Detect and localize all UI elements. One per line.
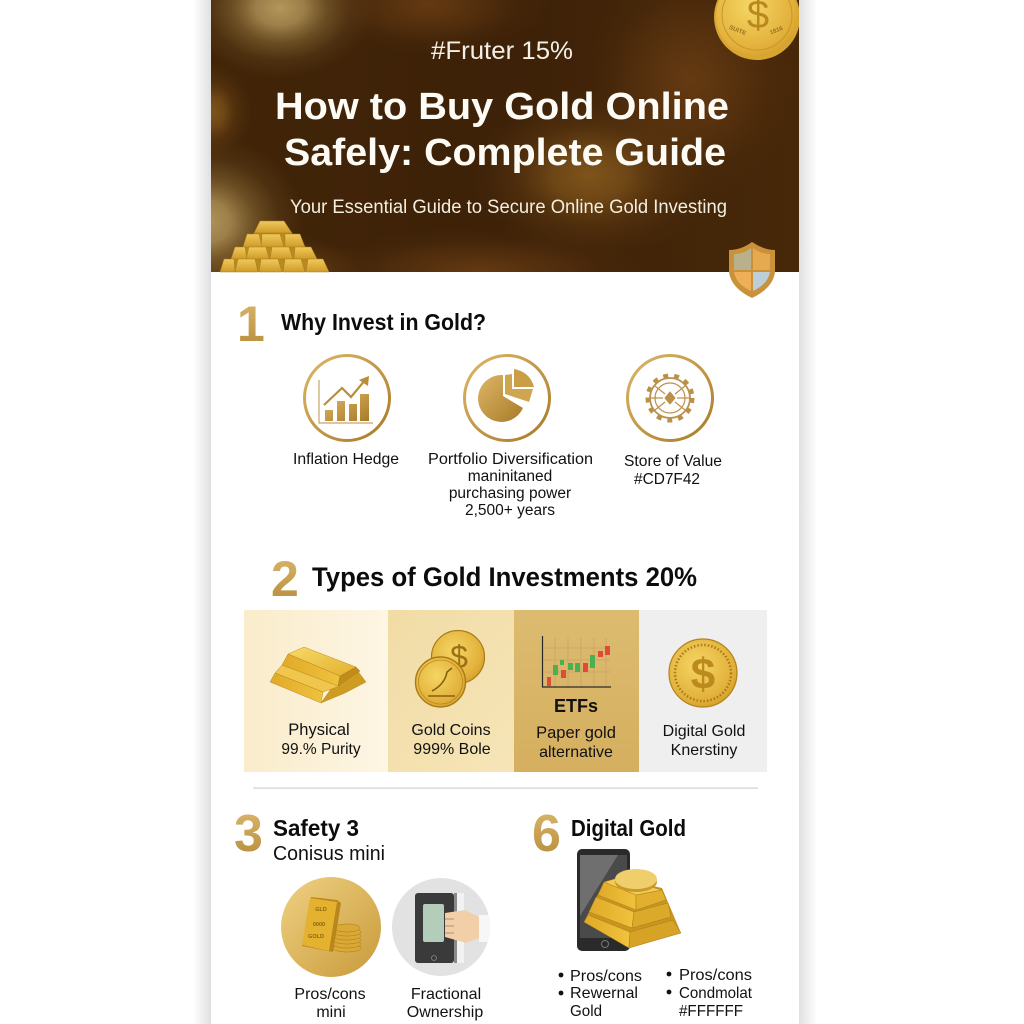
- section 1: why invest in gold: [237, 296, 722, 519]
- number 1: 1: [237, 296, 265, 352]
- heading: Why Invest in Gold?: [281, 309, 486, 335]
- icon: phone and hand circle: [392, 878, 491, 976]
- label: pros/cons mini: mini: [316, 1004, 346, 1021]
- bullet list right: #FFFFFF: [679, 1003, 743, 1020]
- label: portfolio diversification: 2,500+ years: [465, 502, 555, 519]
- header background with bokeh glow: [211, 0, 799, 272]
- label: portfolio diversification: Portfolio Diversification: [428, 451, 593, 468]
- label: Knerstiny: [671, 742, 737, 759]
- icon: two coins: $: [450, 639, 468, 675]
- icon: gold bar and coins circle: 0000: [313, 922, 325, 928]
- icon: gold bar and coins circle: GLD: [315, 907, 327, 913]
- bullet list left: Pros/cons: [570, 968, 642, 985]
- icon: phone with gold stack: [577, 849, 681, 951]
- icon: dollar coin: [669, 639, 737, 707]
- label: store of value: Store of Value: [624, 453, 722, 470]
- heading: Safety 3: [273, 815, 359, 841]
- section 2: types of gold investments: [244, 551, 767, 772]
- panel: digital gold: [639, 610, 767, 772]
- label: [536, 696, 616, 761]
- bullet list right: [667, 967, 753, 1020]
- icon: gold coin top right: 1816: [769, 26, 785, 36]
- label: portfolio diversification: maninitaned: [468, 468, 552, 485]
- label: ETFs: [554, 696, 598, 716]
- icon: gold bars: [270, 647, 366, 703]
- label: Physical: [288, 721, 350, 739]
- label: pros/cons mini: Pros/cons: [294, 986, 366, 1003]
- main title: How to Buy Gold Online: [275, 86, 729, 128]
- heading: Types of Gold Investments 20%: [312, 562, 697, 592]
- icon: gold bar and coins circle: [281, 877, 381, 977]
- label: alternative: [539, 744, 613, 761]
- section 3: safety: [234, 805, 491, 1021]
- header tag: #Fruter 15%: [431, 37, 573, 65]
- bullet list left: Gold: [570, 1003, 602, 1020]
- number 2: 2: [271, 551, 299, 607]
- icon: portfolio pie: [464, 356, 550, 440]
- label: portfolio diversification: purchasing power: [449, 485, 571, 502]
- label: store of value: #CD7F42: [634, 471, 700, 488]
- label: pros/cons mini: [294, 986, 366, 1021]
- number 3: 3: [234, 805, 263, 863]
- chart: candlesticks: [542, 636, 611, 687]
- label: fractional ownership: Fractional: [411, 986, 481, 1003]
- label: portfolio diversification: [428, 451, 593, 519]
- label: [281, 721, 361, 758]
- bullet list left: Rewernal: [570, 985, 638, 1002]
- label: Digital Gold: [663, 723, 745, 740]
- icon: inflation hedge chart: [304, 356, 390, 440]
- main title: Safely: Complete Guide: [284, 132, 726, 174]
- icon: gold coin top right: SUITE: [728, 25, 747, 37]
- bullet list right: Pros/cons: [679, 967, 752, 984]
- label: fractional ownership: [407, 986, 483, 1021]
- bullet list right: Condmolat: [679, 985, 753, 1002]
- bullet list left: [559, 968, 642, 1020]
- section 6: digital gold: [532, 805, 753, 1020]
- subheading: Conisus mini: [273, 843, 385, 865]
- label: [411, 722, 491, 758]
- panel: physical: [244, 610, 388, 772]
- label: Gold Coins: [411, 722, 491, 739]
- main title: [275, 86, 729, 174]
- label: [663, 723, 745, 759]
- label: inflation hedge: Inflation Hedge: [293, 451, 399, 468]
- panel: gold coins: [388, 610, 514, 772]
- icon: gold bar and coins circle: GOLD: [308, 934, 324, 940]
- subtitle: Your Essential Guide to Secure Online Gold Investing: [290, 196, 727, 218]
- icon: shield: [729, 242, 775, 298]
- heading: Digital Gold: [571, 815, 686, 841]
- panel: etfs: [514, 610, 639, 772]
- label: 99.% Purity: [281, 741, 361, 758]
- icon: two coins: [416, 630, 484, 707]
- label: Paper gold: [536, 724, 616, 742]
- page card with soft edge shadow: [193, 0, 817, 1024]
- label: fractional ownership: Ownership: [407, 1004, 483, 1021]
- label: 999% Bole: [413, 741, 491, 758]
- header banner: [211, 0, 799, 298]
- icon: gold bar pyramid: [220, 221, 329, 272]
- label: store of value: [624, 453, 722, 488]
- number 6: 6: [532, 805, 561, 863]
- icon: store of value gear: [628, 356, 712, 440]
- icon: dollar coin: $: [691, 650, 715, 699]
- icon: gold coin top right: [714, 0, 800, 60]
